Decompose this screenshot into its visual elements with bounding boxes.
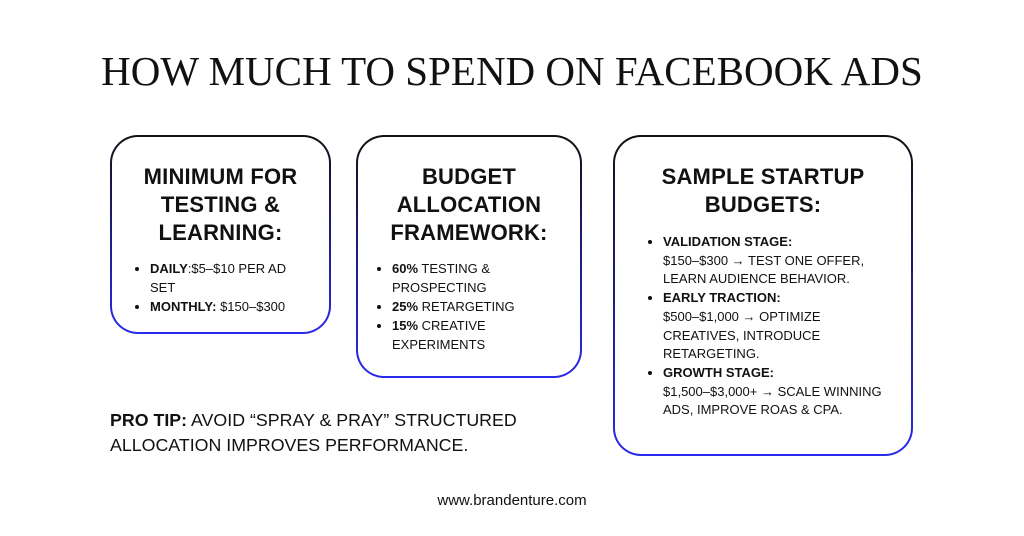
heading: MINIMUM FOR xyxy=(144,164,297,189)
bullet list: DAILY:$5–$10 PER AD SET xyxy=(150,261,286,295)
bullet list: 25% RETARGETING xyxy=(392,299,515,314)
bullet list: VALIDATION STAGE: xyxy=(663,234,792,249)
bullet list: 60% TESTING & PROSPECTING xyxy=(392,261,490,295)
bullet list xyxy=(648,234,882,417)
bullet list: GROWTH STAGE: xyxy=(663,365,774,380)
bullet list: MONTHLY: $150–$300 xyxy=(150,299,285,314)
heading: ALLOCATION xyxy=(397,192,541,217)
panel: sample startup budgets xyxy=(613,135,913,456)
bullet list: 15% CREATIVE EXPERIMENTS xyxy=(392,318,486,352)
title: HOW MUCH TO SPEND ON FACEBOOK ADS xyxy=(101,48,923,94)
heading: FRAMEWORK: xyxy=(390,220,548,245)
pro tip: PRO TIP: AVOID “SPRAY & PRAY” STRUCTURED ALLOCATION IMPROVES PERFORMANCE. xyxy=(110,410,517,455)
heading xyxy=(144,164,297,245)
panel: budget allocation xyxy=(356,135,582,378)
footer url: www.brandenture.com xyxy=(437,492,587,509)
bullet list: EARLY TRACTION: xyxy=(663,290,781,305)
heading: BUDGETS: xyxy=(705,192,821,217)
heading: SAMPLE STARTUP xyxy=(662,164,864,189)
bullet list: $150–$300 → TEST ONE OFFER, LEARN AUDIENCE BEHAVIOR. xyxy=(663,253,864,286)
heading xyxy=(390,164,548,245)
panel: minimum for testing xyxy=(110,135,331,334)
bullet list: $1,500–$3,000+ → SCALE WINNING ADS, IMPROVE ROAS & CPA. xyxy=(663,384,882,417)
heading: BUDGET xyxy=(422,164,516,189)
bullet list: $500–$1,000 → OPTIMIZE CREATIVES, INTRODUCE RETARGETING. xyxy=(663,309,821,361)
bullet list xyxy=(377,261,515,352)
heading: LEARNING: xyxy=(158,220,282,245)
heading xyxy=(662,164,864,217)
bullet list xyxy=(135,261,286,314)
heading: TESTING & xyxy=(161,192,280,217)
